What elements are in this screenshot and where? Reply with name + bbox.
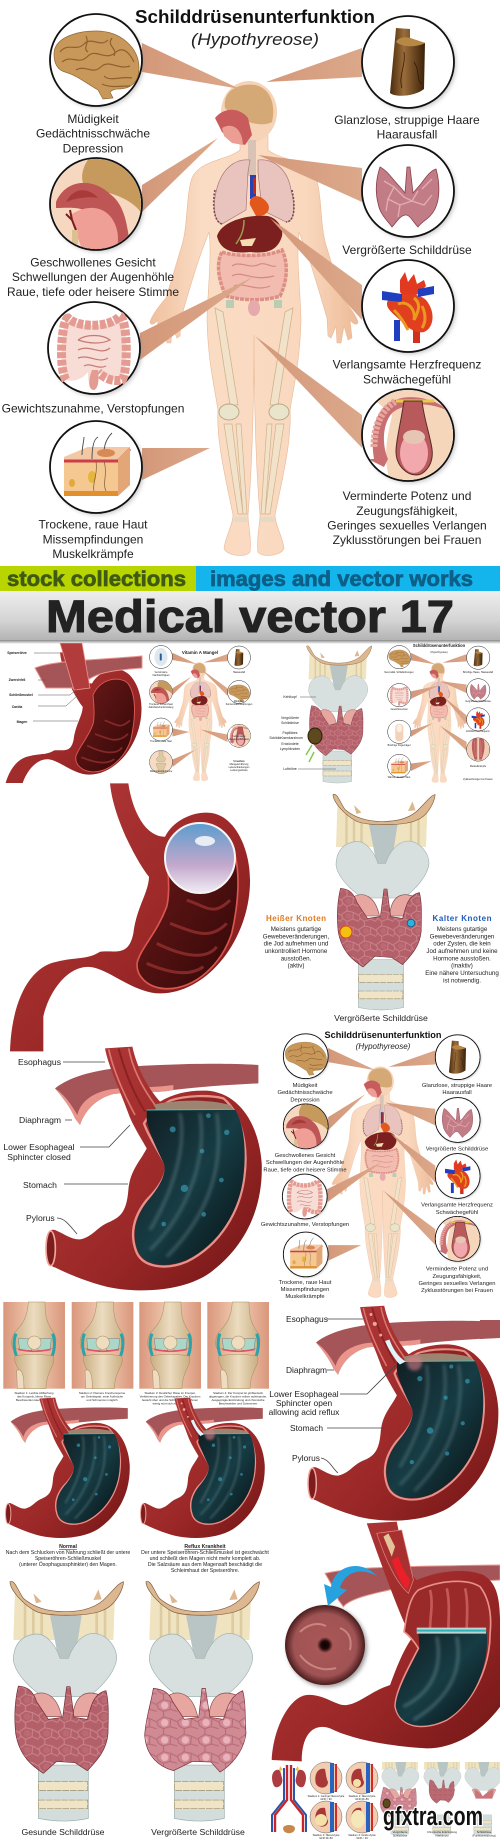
hot node text: ausstoßen. — [281, 956, 312, 962]
banner: stock collections: stock collections — [7, 568, 186, 591]
thumbnail poster labels: Erhöhte Herzfrequenz — [466, 730, 490, 733]
labels: potency: Zyklusstörungen bei Frauen — [333, 533, 481, 547]
labels: Sphincter open — [276, 1398, 333, 1408]
caption: Schleimhaut der Speiseröhre. — [171, 1568, 239, 1574]
poster labels: Geringes sexuelles Verlangen — [418, 1281, 496, 1287]
cold node text: Jod aufnehmen und keine — [426, 948, 498, 955]
caption: Reflux Krankheit — [184, 1544, 226, 1550]
poster labels: Schwächegefühl — [436, 1210, 478, 1216]
thumbnail labels: Lymphknoten — [280, 747, 300, 751]
thumbnail labels: Magen — [17, 720, 27, 724]
labels: hair: Glanzlose, struppige Haare — [334, 113, 480, 127]
poster labels: Gedächtnisschwäche — [277, 1090, 333, 1096]
cold node text: Meistens gutartige — [437, 926, 488, 933]
labels: skin: Missempfindungen — [43, 532, 143, 546]
poster labels: Verlangsamte Herzfrequenz — [421, 1202, 493, 1208]
thumbnail labels: Schilddrüse — [281, 721, 299, 725]
labels: face: Geschwollenes Gesicht — [30, 256, 156, 270]
thumbnail poster labels: (Hyperthyreose) — [430, 651, 448, 654]
thumbnail labels: Schließmuskel — [9, 693, 33, 697]
thumbnail labels: Luftröhre — [283, 767, 297, 771]
kidney captions: GFR < 29 — [356, 1836, 368, 1840]
thumbnail poster: Hyperthyreose — [384, 643, 493, 783]
thumbnail poster labels: Zeugungsfähigkeit — [229, 738, 249, 741]
thumbnail poster labels: Müdigkeit — [234, 700, 244, 703]
poster labels — [261, 1083, 496, 1300]
hot node text: Heißer Knoten — [266, 914, 326, 923]
thumbnail labels: Cardia — [12, 705, 22, 709]
cold node text: Eine nähere Untersuchung — [425, 970, 499, 977]
caption: Speiseröhren-Schließmuskel — [35, 1556, 101, 1562]
thumbnail poster labels: Gewichtsverlust — [391, 708, 408, 711]
thumbnail poster labels: Trockene Schleimhaut — [149, 703, 173, 706]
kidney captions — [308, 1794, 376, 1840]
stage captions: Stadium 2: Kleinere Knochensporne — [79, 1391, 126, 1395]
labels: Stomach — [290, 1423, 323, 1433]
banner: images and vector works: images and vector works — [210, 568, 473, 591]
hot node text: (aktiv) — [288, 962, 304, 970]
thumbnail poster labels: Trockene, raue Haut — [150, 740, 172, 743]
thumbnail poster title: Vitamin A Mangel — [182, 650, 218, 655]
cold nodule — [407, 919, 415, 927]
thumbnail poster labels: Zahnfleischentzündung — [149, 706, 174, 709]
labels: skin — [39, 518, 148, 561]
labels: face: Schwellungen der Augenhöhle — [12, 270, 174, 284]
stage captions: Beschwerden und Schmerzen — [219, 1402, 258, 1406]
poster labels: Zeugungsfähigkeit, — [432, 1274, 482, 1280]
thumbnail poster labels: Nervosität, Schlafstörungen — [384, 671, 414, 674]
stage captions — [14, 1391, 267, 1406]
labels: potency: Zeugungsfähigkeit, — [356, 504, 458, 518]
stage captions: Stadium 4: Der Knorpel ist größtenteils — [213, 1391, 263, 1395]
thumbnail poster title: Schilddrüsenunterfunktion — [413, 643, 466, 648]
cold node text: Kalter Knoten — [432, 914, 492, 923]
thumbnail poster labels: Verminderte — [233, 735, 246, 738]
caption: Gesunde Schilddrüse — [21, 1827, 105, 1837]
thumbnail captions: (Funktionsstörung) — [472, 1834, 496, 1838]
thumbnail poster labels: Leistungsdrücke — [230, 769, 248, 772]
thumbnail captions: Schilddrüse — [477, 1830, 492, 1834]
caption — [141, 1544, 269, 1574]
enlarged thyroid with hot and cold nodes — [333, 794, 435, 1023]
kidney captions: Stadium 4: Große Zyste — [348, 1833, 376, 1837]
small stomach: reflux — [140, 1398, 269, 1574]
thumbnail poster labels — [149, 671, 253, 773]
hot node text: unkontrolliert Hormone — [265, 948, 328, 955]
poster subtitle: (Hypothyreose) — [191, 30, 319, 49]
labels: hair: Haarausfall — [377, 128, 437, 142]
poster labels: Vergrößerte Schilddrüse — [426, 1146, 488, 1152]
labels — [269, 1314, 340, 1463]
stage captions: Stadium 3: Deutlicher Risse im Knorpel, — [144, 1391, 196, 1395]
stage captions: Ausgeprägte Entzündung und chronische — [211, 1398, 265, 1402]
hot nodule — [340, 926, 352, 938]
caption: Der untere Speiseröhren-Schließmuskel ist geschwächt — [141, 1550, 269, 1556]
enlarged thyroid — [145, 1581, 259, 1837]
thumbnail poster labels: Brüchige Fingernägel — [388, 744, 411, 747]
labels — [3, 1057, 75, 1223]
poster labels: Depression — [290, 1098, 320, 1104]
big stomach with balloon — [10, 783, 250, 1051]
labels: thyroid: Vergrößerte Schilddrüse — [342, 243, 472, 257]
hot node text — [263, 914, 329, 970]
labels: Sphincter closed — [7, 1152, 71, 1162]
poster labels: Muskelkrämpfe — [285, 1294, 325, 1300]
thumbnail labels — [269, 695, 303, 771]
poster labels: Raue, tiefe oder heisere Stimme — [263, 1168, 347, 1174]
knee stages panels — [3, 1302, 269, 1406]
cold node text: oder Zysten, die kein — [433, 940, 491, 948]
caption: Die Salzsäure aus dem Magensaft beschädigt die — [148, 1562, 262, 1568]
poster title: Schilddrüsenunterfunktion — [324, 1030, 442, 1040]
cold node text: (inaktiv) — [451, 962, 473, 970]
labels: brain: Depression — [63, 141, 123, 155]
thumbnail labels: Papilläres — [283, 731, 298, 735]
labels: allowing acid reflux — [269, 1407, 340, 1417]
second poster — [261, 1030, 496, 1300]
thumbnail: red stomach with labels — [6, 643, 142, 783]
thumbnail captions: Vergrößerte — [393, 1830, 408, 1834]
thumbnail labels: Speiseröhre — [7, 651, 27, 655]
poster labels: Müdigkeit — [293, 1083, 318, 1089]
labels: skin: Muskelkrämpfe — [52, 547, 134, 561]
thumbnail captions — [392, 1831, 496, 1837]
poster labels: Trockene, raue Haut — [279, 1280, 332, 1286]
thumbnail: thyroid with carcinoma — [269, 646, 372, 783]
poster title: Schilddrüsenunterfunktion — [135, 6, 375, 27]
labels: brain: Müdigkeit — [67, 112, 119, 126]
cold node text: Gewebeveränderungen — [430, 934, 495, 940]
stage captions: und Schmerzen möglich — [86, 1398, 118, 1402]
labels: potency: Verminderte Potenz und — [343, 489, 471, 503]
thumbnail labels: Zwerchfell — [9, 678, 25, 682]
thumbnail: urinary system — [272, 1765, 306, 1833]
small stomach: normal — [5, 1398, 130, 1568]
large reflux stomach — [269, 1306, 500, 1521]
kidney captions: GFR > 90 — [320, 1797, 332, 1801]
thumbnail labels: Entzündete — [281, 742, 299, 746]
thumbnail poster labels: Wachstumsprobleme — [150, 770, 173, 773]
stage captions: besteht über und die Schmerzen zunehmen — [142, 1398, 198, 1402]
thumbnail poster labels: Vergrößerte Schilddrüse — [465, 700, 492, 703]
labels: heart — [333, 358, 481, 387]
caption: Normal — [59, 1544, 77, 1550]
labels: Diaphragm — [19, 1115, 61, 1125]
labels: weight: Gewichtszunahme, Verstopfungen — [2, 402, 184, 416]
thumbnail poster labels: Zyklusstörungen bei Frauen — [463, 778, 493, 781]
poster labels: Geschwollenes Gesicht — [275, 1153, 336, 1159]
caption — [6, 1544, 130, 1568]
labels: Lower Esophageal — [3, 1142, 75, 1152]
thumbnail poster labels: Brüchige Haare, Haarausfall — [463, 671, 493, 674]
kidney captions: Stadium 3: Nierenzyste — [313, 1833, 340, 1837]
labels: heart: Schwächegefühl — [363, 373, 451, 387]
thumbnail poster: Vitamin A Mangel — [149, 646, 253, 781]
thumbnail poster labels: Nachtsichtigkeit — [153, 674, 170, 677]
kidney captions: GFR 60–89 — [355, 1797, 369, 1801]
cold node text: Hormone ausstoßen. — [433, 956, 491, 962]
stomach with endoscopy — [272, 1522, 500, 1761]
caption: und schließt den Magen nicht mehr komplett ab. — [150, 1556, 260, 1562]
thumbnail poster labels: Warme, feuchte Haut — [388, 776, 411, 779]
thumbnail: kidney circles — [308, 1762, 378, 1840]
large poster: Schilddrüsenunterfunktion — [2, 6, 487, 561]
stage captions: des Knorpels, kleine Risse — [17, 1394, 51, 1398]
caption: Vergrößerte Schilddrüse — [334, 1013, 428, 1023]
healthy thyroid — [10, 1581, 123, 1837]
thumbnail captions: Chronische Entzündung — [427, 1830, 457, 1834]
thumbnail poster labels: Konzentrationsstörungen — [226, 703, 253, 706]
labels: Pylorus — [26, 1213, 55, 1223]
thumbnail labels: Schilddrüsenkarzinom — [269, 736, 303, 740]
stage captions: wenig stört sich zusehends — [153, 1402, 188, 1406]
poster labels: Verminderte Potenz und — [426, 1266, 488, 1272]
labels: brain: Gedächtnisschwäche — [36, 127, 150, 141]
thumbnail poster labels: Mangelernährung — [230, 763, 249, 766]
thumbnails: bottom thyroids — [380, 1762, 500, 1837]
hot node text: die Jod aufnehmen und — [264, 940, 329, 948]
hot node text: Meistens gutartige — [271, 926, 322, 933]
labels: face — [7, 256, 179, 299]
thumbnail poster labels — [384, 651, 493, 781]
labels: heart: Verlangsamte Herzfrequenz — [333, 358, 481, 372]
poster labels: Missempfindungen — [281, 1287, 329, 1293]
thumbnail labels: Kehlkopf — [283, 695, 297, 699]
poster labels: Gewichtszunahme, Verstopfungen — [261, 1222, 349, 1228]
labels: Stomach — [23, 1180, 57, 1190]
stage captions: am Gelenkspalt, erste Aufbrüche — [81, 1394, 123, 1398]
stomach closed sphincter — [3, 1047, 262, 1290]
labels: potency — [327, 489, 487, 547]
thumbnail captions: Hashimoto — [435, 1834, 449, 1838]
labels: Diaphragm — [286, 1365, 327, 1375]
thumbnail poster labels: Verminderte — [155, 671, 168, 674]
gastric balloon — [165, 823, 235, 893]
endoscopic view — [285, 1605, 367, 1687]
headline band: Medical vector 17 — [46, 591, 454, 642]
caption: Nach dem Schlucken von Nahrung schließt der untere — [6, 1550, 130, 1556]
labels: face: Raue, tiefe oder heisere Stimme — [7, 285, 179, 299]
thumbnail captions: Schilddrüse — [393, 1834, 408, 1838]
labels: potency: Geringes sexuelles Verlangen — [327, 519, 487, 533]
caption: (unterer Ösophagussphinkter) den Magen. — [19, 1561, 117, 1568]
poster labels: Zyklusstörungen bei Frauen — [421, 1288, 493, 1294]
thumbnail poster labels: Haarausfall — [233, 671, 246, 674]
stage captions: Stadium 1: Leichte Abflachung — [14, 1391, 54, 1395]
poster labels: Glanzlose, struppige Haare — [422, 1083, 492, 1089]
thumbnail labels: Vergrößerte — [281, 716, 299, 720]
labels: skin: Trockene, raue Haut — [39, 518, 148, 532]
labels: Esophagus — [286, 1314, 328, 1324]
labels: hair — [334, 113, 480, 142]
labels: Esophagus — [18, 1057, 61, 1067]
labels: brain — [36, 112, 150, 155]
stage captions: Beschwerden kaum spürbar — [16, 1398, 52, 1402]
labels: Pylorus — [292, 1453, 320, 1463]
thumbnail poster labels: Muskelkrämpfe — [470, 765, 487, 768]
labels: Lower Esophageal — [269, 1389, 339, 1399]
hot node text: Gewebeveränderungen, — [263, 934, 329, 940]
thumbnail poster labels: Ursachen — [234, 760, 245, 763]
thumbnail labels — [7, 651, 33, 724]
cold node text — [425, 914, 499, 984]
poster labels: Haarausfall — [442, 1090, 472, 1096]
kidney captions: Stadium 2: Nierenzyste — [349, 1794, 376, 1798]
arrow: blue curve — [324, 1566, 377, 1606]
poster subtitle: (Hypothyreose) — [356, 1042, 411, 1051]
stage captions: abgetragen, die Knochen reiben aufeinander. — [209, 1394, 267, 1398]
kidney captions: Stadium 1: Geringe Nierenzyste — [308, 1794, 345, 1798]
cold node text: ist notwendig. — [443, 978, 481, 984]
caption: Vergrößerte Schilddrüse — [151, 1827, 245, 1837]
stage captions: Verkleinerung des Gelenkspaltes. Der Knochen — [140, 1394, 201, 1398]
kidney captions: GFR 30–59 — [319, 1836, 333, 1840]
thumbnail poster labels: Lebererkrankungen — [229, 766, 250, 769]
poster labels: Schwellungen der Augenhöhle — [266, 1160, 344, 1166]
